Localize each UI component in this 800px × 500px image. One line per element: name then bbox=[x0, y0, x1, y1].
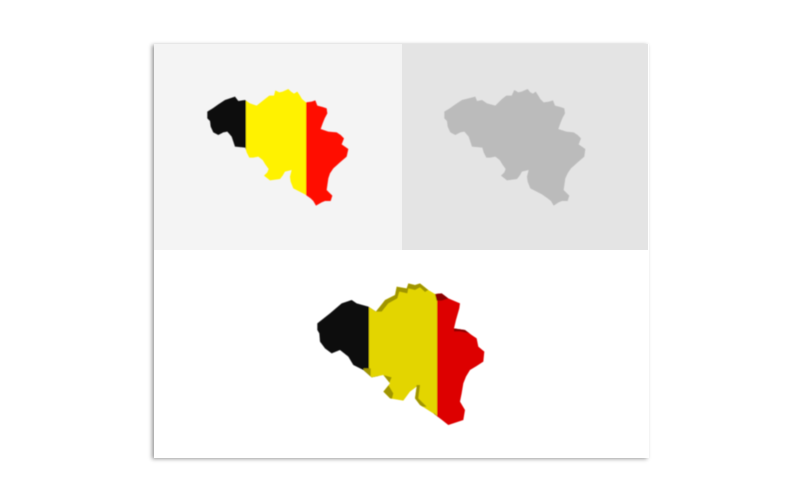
card bbox=[154, 44, 649, 458]
map: gray silhouette bbox=[444, 89, 585, 206]
panel: light gray top left bbox=[154, 44, 402, 250]
extruded edges: red side faces bbox=[433, 293, 470, 426]
panel: white bottom bbox=[154, 250, 649, 458]
extruded edges: yellow side faces bbox=[363, 283, 428, 407]
panel: darker gray top right bbox=[402, 44, 648, 250]
map: 3D Belgium flag bbox=[316, 282, 486, 426]
map: flat Belgium flag bbox=[206, 88, 349, 206]
